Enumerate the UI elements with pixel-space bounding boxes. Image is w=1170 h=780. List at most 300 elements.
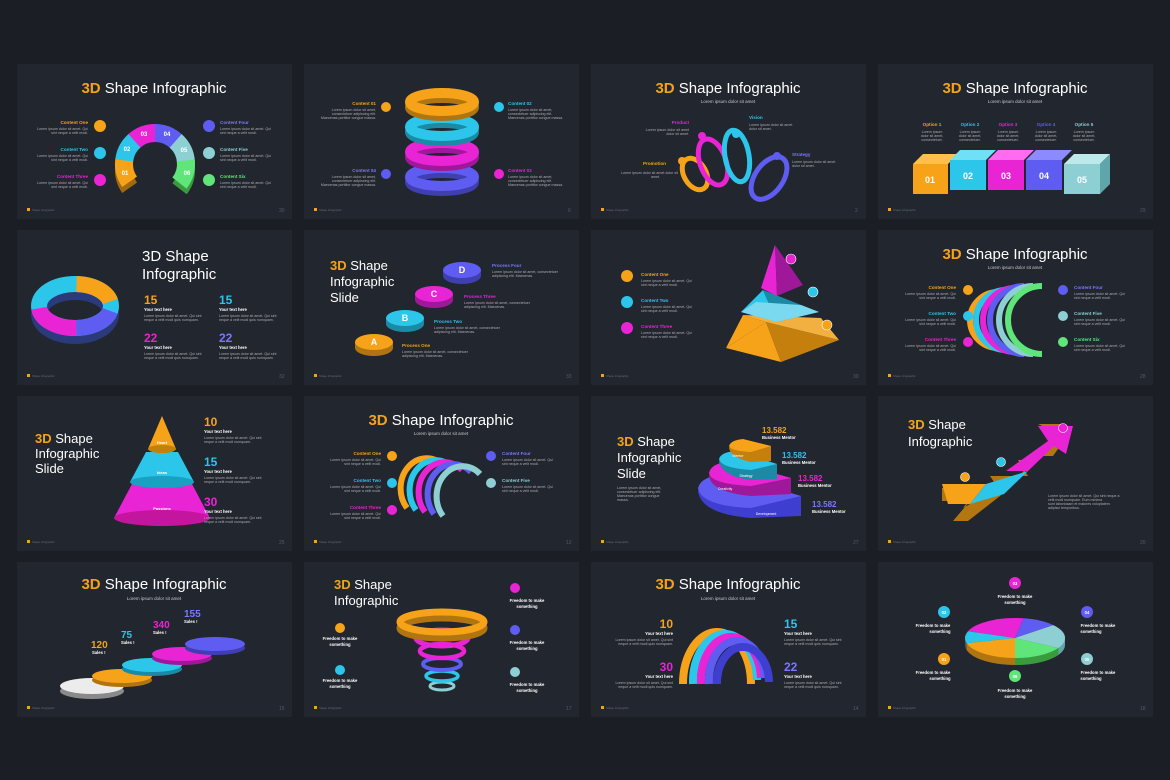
title: 3D Shape Infographic	[942, 246, 1088, 263]
labels: sint neque a velit modi.	[344, 462, 381, 466]
labels: Lorem ipsum dolor sit amet. Qui	[330, 458, 381, 462]
stats: Lorem ipsum dolor sit amet. Qui sint	[204, 436, 262, 440]
slide 4: cubes: 29	[1140, 208, 1146, 214]
options: Lorem ipsum	[1036, 130, 1056, 134]
pie labels: 06	[1013, 674, 1018, 679]
stats: Lorem ipsum dolor sit amet. Qui sint	[784, 681, 842, 685]
slide 2: stacked rings	[304, 64, 579, 219]
labels: Lorem ipsum dolor sit amet. Qui	[330, 512, 381, 516]
slide 12: zigzag arrow: 20	[1140, 540, 1146, 546]
options: dolor sit amet,	[1035, 134, 1057, 138]
labels: Content Three	[350, 505, 381, 510]
title: 3D Shape	[908, 417, 966, 432]
labels: sint neque a velit modi.	[919, 296, 956, 300]
stats	[615, 617, 842, 689]
title: 3D Shape Infographic	[81, 80, 227, 97]
stats: 30	[204, 495, 218, 509]
slide 15: rainbow arches: Shape Infographic	[606, 706, 629, 710]
labels: Content Two	[641, 298, 669, 303]
labels: something	[516, 604, 538, 609]
pie labels	[916, 577, 1116, 699]
stats: Your text here	[219, 345, 248, 350]
slide 10: arches	[304, 396, 579, 551]
labels: Freedom to make	[323, 636, 358, 641]
labels: something	[516, 688, 538, 693]
cube row: 05	[1077, 175, 1087, 185]
right labels: Lorem ipsum dolor sit amet. Qui	[220, 127, 271, 131]
pie labels: 04	[1085, 610, 1090, 615]
slide 3: chain rings	[591, 64, 866, 219]
slide 13: sales steps	[17, 562, 292, 717]
left labels: Lorem ipsum dolor sit amet. Qui	[37, 127, 88, 131]
slide 5: donut with numbers: Shape Infographic	[32, 374, 55, 378]
left labels	[37, 120, 106, 189]
options: consectetuer.	[1073, 138, 1095, 142]
stats: neque a velit modi quis numquam.	[784, 685, 839, 689]
ring labels: Vision	[749, 115, 763, 120]
values: Sales !	[184, 619, 198, 624]
labels: Content Five	[502, 478, 530, 483]
slide 6: coins process: Slide	[330, 290, 359, 305]
slide 2: stacked rings: Shape Infographic	[319, 208, 342, 212]
options: Lorem ipsum	[922, 130, 942, 134]
labels: Lorem ipsum dolor sit amet. Qui	[330, 485, 381, 489]
right labels: Content Six	[220, 174, 246, 179]
ring labels: Lorem ipsum dolor sit amet,	[508, 108, 552, 112]
ring labels: Promotion	[643, 161, 666, 166]
stats: 22	[144, 331, 158, 345]
stats: Lorem ipsum dolor sit amet. Qui sint	[784, 638, 842, 642]
title: 3D Shape	[330, 258, 388, 273]
labels: something	[329, 642, 351, 647]
left labels: sint neque a velit modi.	[51, 185, 88, 189]
labels	[330, 451, 553, 520]
labels: Lorem ipsum dolor sit amet. Qui	[641, 331, 692, 335]
stats: Your text here	[784, 674, 813, 679]
slide 5: donut with numbers: 32	[279, 374, 285, 380]
labels: Content One	[928, 285, 956, 290]
right labels: Lorem ipsum dolor sit amet. Qui	[220, 181, 271, 185]
pie labels: something	[1004, 600, 1026, 605]
coins	[355, 262, 481, 356]
options: consectetuer.	[1035, 138, 1057, 142]
slide 7: pyramid: 30	[853, 374, 859, 380]
pie labels: 05	[1085, 657, 1090, 662]
arrow	[942, 424, 1073, 521]
slide 11: tiered wedges: consectetuer adipiscing elit.	[617, 490, 661, 494]
horseshoe ring chart: 04	[164, 132, 171, 138]
stats: neque a velit modi quis numquam.	[784, 642, 839, 646]
ring labels: Product	[672, 120, 689, 125]
ring labels: Maecenas porttitor congue massa.	[321, 183, 376, 187]
stats: 22	[219, 331, 233, 345]
title: 3D Shape Infographic	[655, 576, 801, 593]
ring labels: Lorem ipsum dolor sit amet	[749, 123, 792, 127]
stacked rings	[410, 93, 474, 191]
options: Lorem ipsum	[960, 130, 980, 134]
stats: neque a velit modi numquam.	[204, 480, 251, 484]
process labels: Process Four	[492, 263, 522, 268]
coins: D	[459, 265, 466, 275]
pie labels: Freedom to make	[1081, 670, 1116, 675]
horseshoe ring chart: 05	[181, 148, 188, 154]
labels: Freedom to make	[510, 598, 545, 603]
horseshoe ring chart: 01	[122, 171, 129, 177]
values: 120	[91, 640, 108, 651]
slide 12: zigzag arrow: Infographic	[908, 434, 973, 449]
slide 8: C arcs: Lorem ipsum dolor sit amet	[988, 265, 1043, 270]
options: Option 4	[1037, 122, 1056, 127]
labels: something	[329, 684, 351, 689]
pie labels: 03	[1013, 581, 1018, 586]
values: 13.582	[782, 451, 807, 460]
labels: Lorem ipsum dolor sit amet. Qui	[502, 485, 553, 489]
options: dolor sit amet,	[959, 134, 981, 138]
pie labels: Freedom to make	[1081, 623, 1116, 628]
process labels: Lorem ipsum dolor sit amet, consectetuer	[402, 350, 469, 354]
wedges: Development	[756, 512, 776, 516]
right labels: sint neque a velit modi.	[220, 185, 257, 189]
slide 1: horseshoe ring: 30	[279, 208, 285, 214]
coins: C	[431, 289, 438, 299]
process labels: adipiscing elit. Maecenas.	[434, 330, 475, 334]
slide 11: tiered wedges: Shape Infographic	[606, 540, 629, 544]
slide 11: tiered wedges	[591, 396, 866, 551]
process labels: adipiscing elit. Maecenas.	[492, 274, 533, 278]
horseshoe ring chart	[111, 120, 199, 213]
labels: Freedom to make	[510, 640, 545, 645]
title: 3D Shape Infographic	[81, 576, 227, 593]
options: consectetuer.	[959, 138, 981, 142]
cone: Passions	[153, 506, 172, 511]
text: adipisci temporibus.	[1048, 506, 1080, 510]
process labels: Lorem ipsum dolor sit amet, consectetuer	[464, 301, 531, 305]
slide 15: rainbow arches: 14	[853, 706, 859, 712]
right labels	[203, 120, 271, 189]
pie labels: Freedom to make	[998, 594, 1033, 599]
process labels: adipiscing elit. Maecenas.	[464, 305, 505, 309]
values: 13.582	[798, 474, 823, 483]
slide 7: pyramid: Shape Infographic	[606, 374, 629, 378]
slide 9: cone: Shape Infographic	[32, 540, 55, 544]
labels: sint neque a velit modi.	[1074, 348, 1111, 352]
slide 14: spiral	[304, 562, 579, 717]
stats: Your text here	[144, 307, 173, 312]
values: Business Mentor	[812, 509, 846, 514]
stats: Your text here	[204, 509, 233, 514]
labels: Lorem ipsum dolor sit amet. Qui	[641, 279, 692, 283]
labels: sint neque a velit modi.	[344, 516, 381, 520]
pie labels: something	[929, 629, 951, 634]
slide 9: cone: Slide	[35, 461, 64, 476]
slide 1: horseshoe ring	[17, 64, 292, 219]
slide 5: donut with numbers	[17, 230, 292, 385]
ring labels: Lorem ipsum dolor sit amet dolor sit	[621, 171, 678, 175]
slide 11: tiered wedges: Maecenas porttitor congue	[617, 494, 660, 498]
left labels: sint neque a velit modi.	[51, 131, 88, 135]
stats: Your text here	[204, 469, 233, 474]
slide 5: donut with numbers: Infographic	[142, 266, 217, 283]
stats: Lorem ipsum dolor sit amet. Qui sint	[204, 516, 262, 520]
labels: Content Four	[1074, 285, 1103, 290]
options: Option 5	[1075, 122, 1094, 127]
chain rings	[677, 128, 794, 206]
left labels: sint neque a velit modi.	[51, 158, 88, 162]
slide 3: chain rings: 2	[855, 208, 858, 214]
stats: neque a velit modi quis numquam.	[618, 642, 673, 646]
slide 12: zigzag arrow: Shape Infographic	[893, 540, 916, 544]
options: dolor sit amet,	[921, 134, 943, 138]
spiral	[400, 612, 484, 690]
ring labels: Maecenas porttitor congue massa.	[508, 183, 563, 187]
options: dolor sit amet,	[997, 134, 1019, 138]
values: Business Mentor	[798, 483, 832, 488]
title: 3D Shape Infographic	[368, 412, 514, 429]
text: Lorem ipsum dolor sit amet. Qui sint neque a	[1048, 494, 1120, 498]
ring labels: Lorem ipsum dolor sit amet	[792, 160, 835, 164]
slide 6: coins process	[304, 230, 579, 385]
slide 11: tiered wedges: 27	[853, 540, 859, 546]
right labels: Content Five	[220, 147, 248, 152]
stats: neque a velit modi quis numquam.	[219, 356, 274, 360]
options: consectetuer.	[997, 138, 1019, 142]
labels	[621, 270, 692, 339]
labels: Content Three	[925, 337, 956, 342]
slide 6: coins process: Shape Infographic	[319, 374, 342, 378]
values	[91, 609, 201, 655]
stats: Your text here	[784, 631, 813, 636]
labels: Content Five	[1074, 311, 1102, 316]
ring labels: Lorem ipsum dolor sit amet	[646, 128, 689, 132]
cone	[114, 416, 210, 526]
cube row: 02	[963, 171, 973, 181]
stats: Lorem ipsum dolor sit amet. Qui sint	[615, 681, 673, 685]
ring labels: Strategy	[792, 152, 811, 157]
labels: sint neque a velit modi.	[344, 489, 381, 493]
slide 8: C arcs: 28	[1140, 374, 1146, 380]
ring labels: consectetuer adipiscing elit.	[332, 179, 376, 183]
slide 11: tiered wedges: Lorem ipsum dolor sit amet,	[617, 486, 661, 490]
stats: neque a velit modi quis numquam.	[219, 318, 274, 322]
pie labels: Freedom to make	[998, 688, 1033, 693]
stats: neque a velit modi quis numquam.	[618, 685, 673, 689]
stats: 30	[660, 660, 673, 674]
labels: Content One	[353, 451, 381, 456]
process labels: Lorem ipsum dolor sit amet, consectetuer	[492, 270, 559, 274]
arches	[401, 458, 480, 516]
stats: 10	[204, 415, 218, 429]
labels: something	[516, 646, 538, 651]
slide 10: arches: 12	[566, 540, 572, 546]
stats	[144, 293, 277, 360]
options: Option 3	[999, 122, 1018, 127]
stats: Lorem ipsum dolor sit amet. Qui sint	[219, 314, 277, 318]
labels: sint neque a velit modi.	[641, 309, 678, 313]
stats: Your text here	[219, 307, 248, 312]
labels: Content Six	[1074, 337, 1100, 342]
labels: sint neque a velit modi.	[919, 322, 956, 326]
left labels: Content Two	[61, 147, 88, 152]
slide 10: arches: Lorem ipsum dolor sit amet	[414, 431, 469, 436]
slide 6: coins process: 33	[566, 374, 572, 380]
slide 9: cone: 25	[279, 540, 285, 546]
text: velit modi numquam. Eum minima	[1048, 498, 1102, 502]
right labels: sint neque a velit modi.	[220, 158, 257, 162]
ring labels: Content 01	[352, 101, 376, 106]
title: 3D Shape Infographic	[655, 80, 801, 97]
text	[1048, 494, 1120, 510]
stats: neque a velit modi quis numquam.	[144, 356, 199, 360]
process labels: Lorem ipsum dolor sit amet, consectetuer	[434, 326, 501, 330]
stats: Your text here	[204, 429, 233, 434]
ring labels: dolor sit amet.	[666, 132, 689, 136]
stats: neque a velit modi numquam.	[204, 440, 251, 444]
labels: Lorem ipsum dolor sit amet. Qui	[905, 292, 956, 296]
slide 11: tiered wedges: Slide	[617, 466, 646, 481]
labels: Lorem ipsum dolor sit amet. Qui	[1074, 344, 1125, 348]
wedges: Mentor	[733, 454, 744, 458]
pie labels: something	[1080, 676, 1102, 681]
slide 3: chain rings: Shape Infographic	[606, 208, 629, 212]
stats: neque a velit modi quis numquam.	[144, 318, 199, 322]
stats	[204, 415, 262, 524]
ring labels: Lorem ipsum dolor sit amet,	[508, 175, 552, 179]
labels: Freedom to make	[323, 678, 358, 683]
ring labels: consectetuer adipiscing elit.	[508, 179, 552, 183]
ring labels: Maecenas porttitor congue massa.	[508, 116, 563, 120]
labels: sint neque a velit modi.	[641, 335, 678, 339]
pie labels: 01	[942, 657, 947, 662]
labels: Freedom to make	[510, 682, 545, 687]
cube row	[913, 150, 1110, 194]
stats: 15	[204, 455, 218, 469]
values: 155	[184, 609, 201, 620]
stats: Lorem ipsum dolor sit amet. Qui sint	[144, 352, 202, 356]
options: Lorem ipsum	[1074, 130, 1094, 134]
labels: Content One	[641, 272, 669, 277]
horseshoe ring chart: 06	[184, 171, 191, 177]
title: 3D Shape	[35, 431, 93, 446]
labels: Lorem ipsum dolor sit amet. Qui	[905, 344, 956, 348]
labels	[905, 285, 1125, 352]
pie labels: something	[1004, 694, 1026, 699]
slide 3: chain rings: Lorem ipsum dolor sit amet	[701, 99, 756, 104]
labels: Lorem ipsum dolor sit amet. Qui	[641, 305, 692, 309]
labels	[323, 583, 545, 693]
left labels: Lorem ipsum dolor sit amet. Qui	[37, 154, 88, 158]
values: 13.582	[812, 500, 837, 509]
values: 75	[121, 630, 133, 641]
pie labels: 02	[942, 610, 947, 615]
stats: Lorem ipsum dolor sit amet. Qui sint	[144, 314, 202, 318]
stats: 15	[219, 293, 233, 307]
ring labels: consectetuer adipiscing elit.	[332, 112, 376, 116]
options: Option 2	[961, 122, 980, 127]
slide 14: spiral: Infographic	[334, 593, 399, 608]
values: Sales !	[121, 640, 135, 645]
pyramid	[726, 245, 839, 362]
labels: sint neque a velit modi.	[502, 462, 539, 466]
cube row: 01	[925, 175, 935, 185]
ring labels	[321, 101, 563, 187]
stats: 15	[784, 617, 798, 631]
slide 15: rainbow arches: Lorem ipsum dolor sit amet	[701, 596, 756, 601]
stats: Your text here	[645, 631, 674, 636]
slide 11: tiered wedges: massa.	[617, 498, 629, 502]
pie labels: Freedom to make	[916, 670, 951, 675]
labels: sint neque a velit modi.	[1074, 296, 1111, 300]
cube row: 04	[1039, 171, 1049, 181]
ring labels	[621, 115, 835, 179]
slide 8: C arcs: Shape Infographic	[893, 374, 916, 378]
arches	[683, 632, 769, 684]
right labels: sint neque a velit modi.	[220, 131, 257, 135]
options	[921, 122, 1095, 142]
stats: 15	[144, 293, 158, 307]
slide 12: zigzag arrow	[878, 396, 1153, 551]
ring labels: consectetuer adipiscing elit.	[508, 112, 552, 116]
slide 14: spiral: Shape Infographic	[319, 706, 342, 710]
labels: Lorem ipsum dolor sit amet. Qui	[905, 318, 956, 322]
labels: sint neque a velit modi.	[1074, 322, 1111, 326]
ring labels: Content 03	[508, 168, 532, 173]
process labels: Process One	[402, 343, 431, 348]
right labels: Lorem ipsum dolor sit amet. Qui	[220, 154, 271, 158]
steps	[60, 637, 245, 699]
process labels: adipiscing elit. Maecenas.	[402, 354, 443, 358]
options: consectetuer.	[921, 138, 943, 142]
stats: 10	[660, 617, 673, 631]
process labels	[402, 263, 559, 358]
ring labels: Content 04	[352, 168, 376, 173]
labels: Lorem ipsum dolor sit amet. Qui	[502, 458, 553, 462]
left labels: Content One	[60, 120, 88, 125]
text: sunt laboriosam et maiores voluptatem	[1048, 502, 1110, 506]
horseshoe ring chart: 02	[124, 147, 131, 153]
labels: Content Two	[354, 478, 381, 483]
stats: Lorem ipsum dolor sit amet. Qui sint	[204, 476, 262, 480]
cube row: 03	[1001, 171, 1011, 181]
values	[762, 426, 846, 514]
left labels: Content Three	[57, 174, 88, 179]
cone: Heart	[157, 440, 168, 445]
ring labels: Lorem ipsum dolor sit amet,	[332, 108, 376, 112]
pie labels: something	[1080, 629, 1102, 634]
labels: Content Four	[502, 451, 531, 456]
labels: sint neque a velit modi.	[641, 283, 678, 287]
pie labels: Freedom to make	[916, 623, 951, 628]
values: 340	[153, 620, 170, 631]
ring labels: dolor sit amet.	[792, 164, 815, 168]
stats: Lorem ipsum dolor sit amet. Qui sint	[615, 638, 673, 642]
slide 9: cone	[17, 396, 292, 551]
labels: Content Three	[641, 324, 673, 329]
labels: Lorem ipsum dolor sit amet. Qui	[1074, 318, 1125, 322]
options: dolor sit amet,	[1073, 134, 1095, 138]
stats: 22	[784, 660, 798, 674]
stats: Your text here	[144, 345, 173, 350]
slide 14: spiral: 17	[566, 706, 572, 712]
right labels: Content Four	[220, 120, 249, 125]
slide 2: stacked rings: 6	[568, 208, 571, 214]
slide 4: cubes	[878, 64, 1153, 219]
title: 3D Shape	[142, 248, 209, 265]
slide 4: cubes: Shape Infographic	[893, 208, 916, 212]
slide 16: 3D pie	[878, 562, 1153, 717]
stats: neque a velit modi numquam.	[204, 520, 251, 524]
slide 16: 3D pie: Shape Infographic	[893, 706, 916, 710]
options: Option 1	[923, 122, 942, 127]
